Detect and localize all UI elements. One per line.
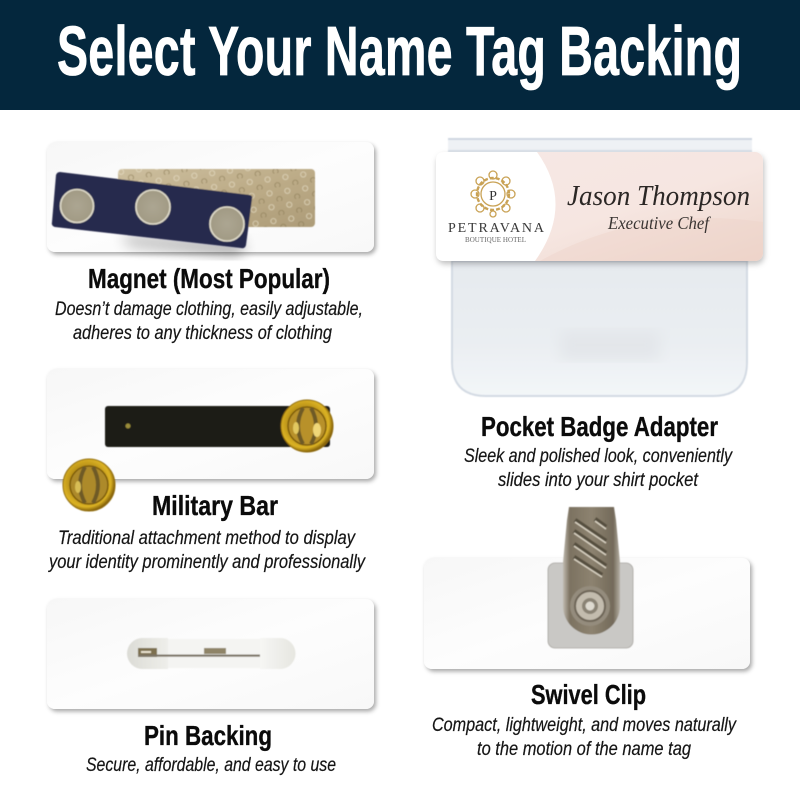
icon: magnet backing (52, 169, 315, 258)
description: military bar: Traditional attachment method to display (58, 527, 356, 549)
name tag blank: swivel clip (424, 558, 750, 669)
header banner (0, 0, 800, 110)
name tag blank: magnet (47, 142, 374, 252)
panel: pin backing (47, 599, 374, 776)
name tag blank: pin backing (47, 599, 374, 709)
heading: pocket badge adapter: Pocket Badge Adapter (481, 411, 718, 442)
description: swivel clip (432, 714, 737, 760)
description: military bar (47, 527, 366, 573)
title: Select Your Name Tag Backing (57, 11, 742, 90)
panel: pocket badge adapter (436, 138, 763, 491)
heading: magnet: Magnet (Most Popular) (88, 263, 330, 294)
heading: military bar: Military Bar (152, 490, 278, 521)
logo wordmark: PETRAVANA (448, 221, 545, 236)
logo: Petravana crest: P (489, 189, 497, 204)
panel: magnet (47, 142, 374, 344)
name: Jason Thompson (567, 180, 750, 212)
printed name tag (436, 152, 763, 261)
icon: pin backing (127, 638, 296, 669)
job title: Executive Chef (607, 213, 712, 233)
logo wordmark (448, 221, 545, 244)
description: pocket badge adapter (464, 445, 733, 491)
heading: swivel clip: Swivel Clip (531, 679, 646, 710)
description: magnet (55, 298, 363, 344)
description: magnet: adheres to any thickness of clothing (73, 322, 332, 344)
description: pocket badge adapter: Sleek and polished look, conveniently (464, 445, 733, 467)
description: pin backing: Secure, affordable, and easy to use (86, 754, 336, 776)
logo: Petravana crest (471, 171, 515, 217)
description: swivel clip: to the motion of the name tag (477, 738, 691, 760)
icon: military bar backing (63, 400, 333, 511)
panel: swivel clip (424, 507, 750, 760)
logo wordmark: BOUTIQUE HOTEL (465, 236, 526, 244)
icon: swivel clip (548, 507, 633, 648)
panel: military bar (47, 369, 374, 573)
heading: pin backing: Pin Backing (144, 720, 272, 751)
name tag blank: military bar (47, 369, 374, 479)
clear pocket sleeve (448, 138, 752, 397)
description: military bar: your identity prominently and professionally (47, 551, 366, 573)
description: magnet: Doesn’t damage clothing, easily adjustable, (55, 298, 363, 320)
description: pocket badge adapter: slides into your shirt pocket (498, 469, 699, 491)
description: swivel clip: Compact, lightweight, and moves naturally (432, 714, 737, 736)
